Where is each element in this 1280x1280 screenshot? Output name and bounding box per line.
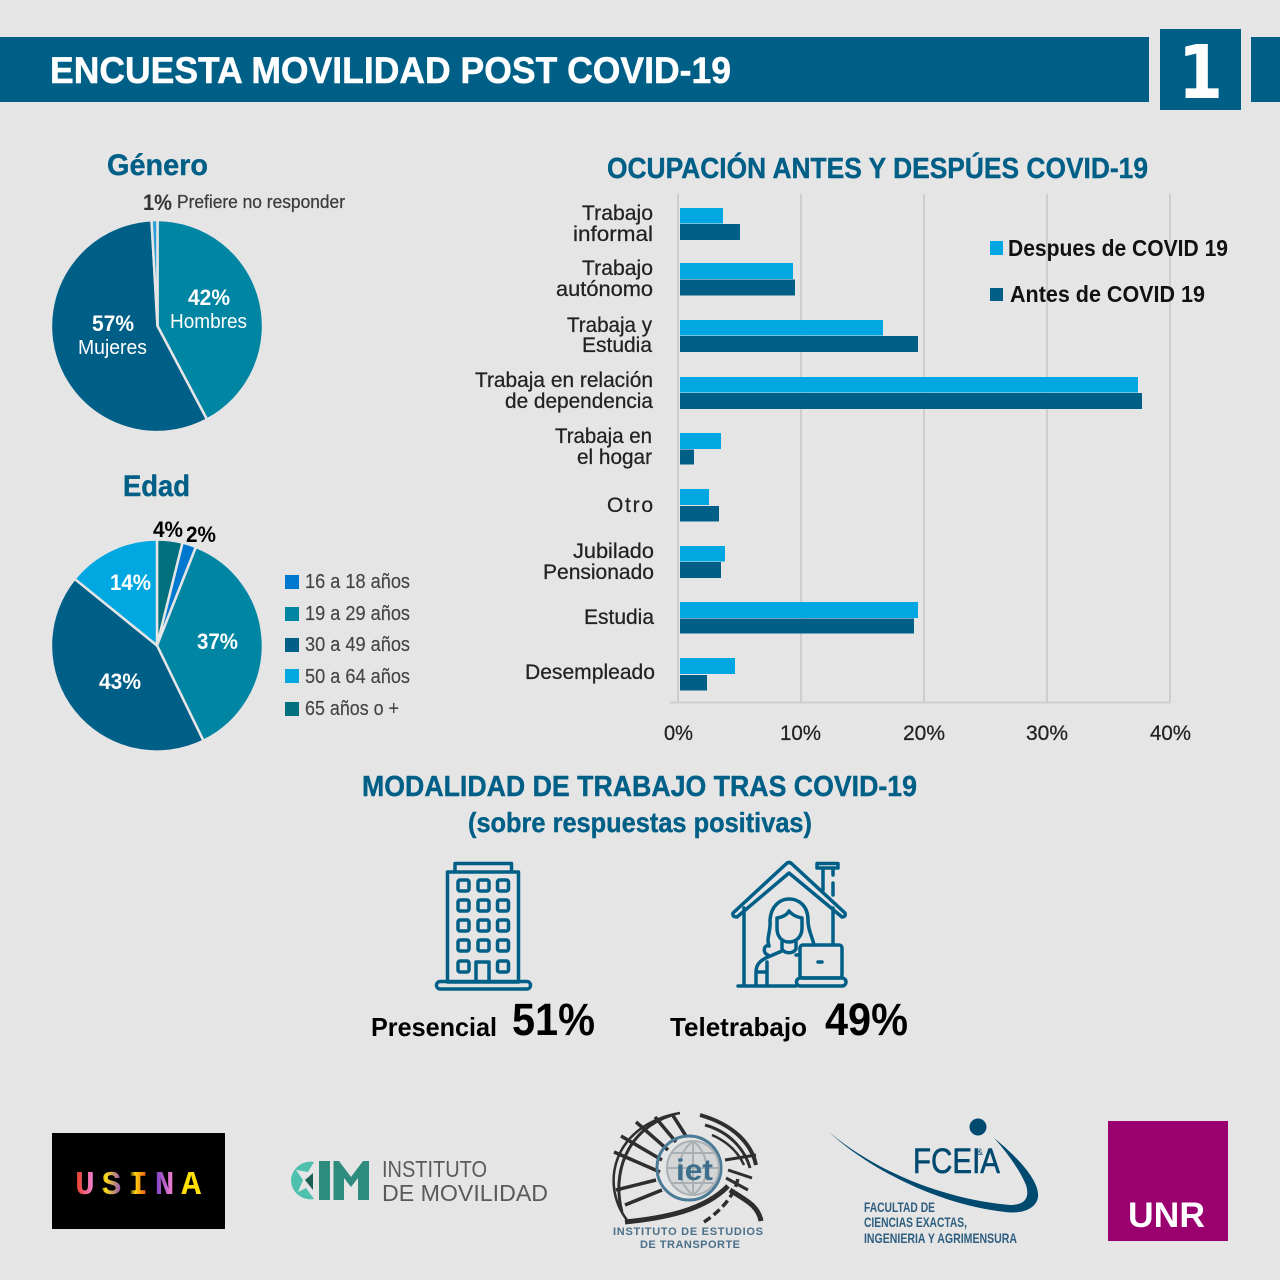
category labels: Trabaja y [567,314,652,337]
logo: FCEIA [829,1118,1038,1246]
age percentages: 37% [197,629,238,654]
label: Teletrabajo 49%: 49% [825,994,908,1045]
legend: edad: 19 a 29 años [305,603,410,625]
age percentages: 2% [186,522,216,547]
logo: UNR [1108,1121,1228,1241]
pie chart: edad [51,539,263,752]
road swirl mark [614,1113,761,1222]
label: 57% Mujeres: 57% [92,311,134,336]
age percentages: 43% [99,669,141,694]
logo: IET Instituto de Estudios de Transporte: iet [676,1154,713,1187]
logo: Instituto de Movilidad: INSTITUTO [382,1156,487,1182]
legend: edad: 65 años o + [305,698,399,720]
header banner [0,37,1280,102]
legend: ocupación: Antes de COVID 19 [1010,281,1205,307]
category labels: Trabaja en relación [475,369,653,392]
logo: FCEIA: FCEIA [913,1142,1001,1181]
category labels: informal [573,223,653,246]
icon: office building [436,864,530,989]
category labels: Trabaja en [555,425,652,448]
slice: Hombres 42% [158,220,263,420]
slice: 65 años o más [157,539,183,646]
label: 42% Hombres: Hombres [170,311,247,333]
age percentages [99,517,238,694]
logo: UNR: UNR [1128,1196,1205,1235]
logo: FCEIA: & [977,1147,983,1157]
age percentages: 14% [110,570,151,595]
legend: ocupación: Despues de COVID 19 [1008,235,1228,261]
legend: edad [285,571,410,720]
label: 1% prefiere no responder: 1% [143,190,172,215]
legend: edad: 16 a 18 años [305,571,410,593]
slice: 19 a 29 años [157,547,263,741]
label: Teletrabajo 49% [670,994,908,1045]
slice: Mujeres 57% [51,220,207,432]
bars: Estudia [680,602,918,634]
label: 42% Hombres [170,285,247,333]
heading: Género: Género [107,149,208,182]
heading: Edad: Edad [123,470,190,503]
label: 57% Mujeres: Mujeres [78,337,147,359]
bars: Otro [680,489,719,522]
logo: USINA [52,1133,225,1229]
axis tick labels: 0% [664,722,693,745]
axis tick labels: 40% [1150,722,1191,745]
logo: USINA: USINA [75,1167,201,1204]
logo: IET Instituto de Estudios de Transporte: DE TRANSPORTE [640,1239,740,1251]
slice: Prefiere no responder 1% [152,220,158,326]
bars: Trabaja y estudia [680,320,918,352]
label: 42% Hombres: 42% [188,285,230,310]
label: Teletrabajo 49%: Teletrabajo [670,1012,807,1042]
logo: Instituto de Movilidad [291,1156,548,1206]
category labels: Estudia [584,606,654,629]
legend: edad: 30 a 49 años [305,634,410,656]
logo: IET Instituto de Estudios de Transporte [613,1113,763,1251]
title: ENCUESTA MOVILIDAD POST COVID-19 [50,50,731,91]
slice: 30 a 49 años [51,579,204,752]
label: 1% prefiere no responder [143,190,345,215]
pie chart: género [51,220,263,432]
category labels: el hogar [577,446,652,469]
bars: Trabajo informal [680,208,740,240]
logo: Instituto de Movilidad: DE MOVILIDAD [382,1180,548,1206]
label: Presencial 51% [371,994,595,1045]
icon: woman teleworking at home [733,862,846,986]
bar chart: ocupación [670,194,1170,703]
logo: FCEIA: INGENIERIA Y AGRIMENSURA [864,1230,1017,1246]
bars: Jubilado Pensionado [680,546,725,578]
category labels: de dependencia [505,390,653,413]
legend: ocupación [990,235,1228,307]
category labels: Pensionado [543,561,654,584]
legend: edad: 50 a 64 años [305,666,410,688]
category labels: Desempleado [525,661,655,684]
heading: modalidad de trabajo: (sobre respuestas positivas) [468,807,812,838]
bars: Relación de dependencia [680,377,1142,409]
mark: teal globe and IM [291,1161,369,1200]
page number badge: 1 [1178,30,1223,116]
slice: 50 a 64 años [75,540,157,646]
label: Presencial 51%: 51% [512,994,595,1045]
axis tick labels: 20% [903,722,945,745]
category labels [475,202,655,684]
axis tick labels: 30% [1026,722,1068,745]
label: 57% Mujeres [78,311,147,359]
heading: modalidad de trabajo [362,771,917,838]
slice: 16 a 18 años [157,543,196,646]
category labels: Jubilado [573,540,654,563]
label: 1% prefiere no responder: Prefiere no responder [177,192,345,212]
heading: ocupación: OCUPACIÓN ANTES Y DESPÚES COVID-19 [607,151,1148,185]
bars: Trabajo autónomo [680,263,795,296]
axis tick labels [664,722,1191,745]
category labels: autónomo [556,278,653,301]
category labels: Otro [607,494,653,517]
category labels: Trabajo [582,202,653,225]
globe [657,1136,721,1200]
bars: Desempleado [680,658,735,690]
logo: IET Instituto de Estudios de Transporte: INSTITUTO DE ESTUDIOS [613,1226,763,1238]
page number badge [1160,29,1241,116]
category labels: Trabajo [582,257,653,280]
heading: modalidad de trabajo: MODALIDAD DE TRABAJO TRAS COVID-19 [362,771,917,803]
age percentages: 4% [153,517,183,542]
logo: FCEIA: CIENCIAS EXACTAS, [864,1214,967,1230]
bars: Trabaja en el hogar [680,433,721,464]
label: Presencial 51%: Presencial [371,1012,497,1042]
logo: FCEIA: FACULTAD DE [864,1199,935,1215]
axis tick labels: 10% [780,722,821,745]
category labels: Estudia [582,334,652,357]
